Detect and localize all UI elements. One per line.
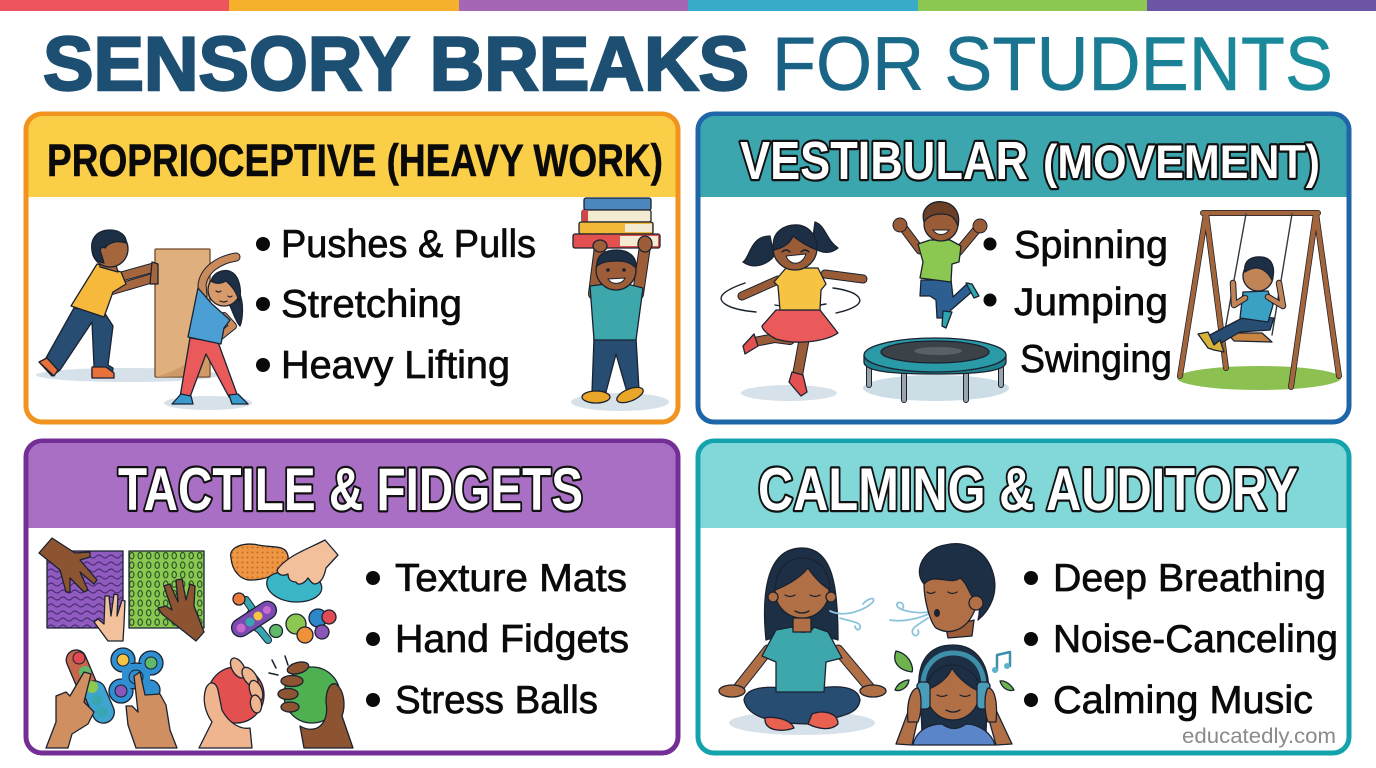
panel 1 list: Pushes & Pulls xyxy=(281,223,536,266)
panel 2 frame xyxy=(698,114,1349,422)
panel 4 list: Noise-Canceling xyxy=(1053,618,1338,661)
panel 2 header band xyxy=(700,116,1346,197)
title: SENSORY BREAKS xyxy=(43,22,749,107)
panel 2 heading: (MOVEMENT) xyxy=(1043,135,1320,188)
panel 2 heading: VESTIBULAR xyxy=(740,131,1028,191)
title xyxy=(43,22,1333,107)
panel: tactile and fidgets xyxy=(26,441,678,753)
icon: music notes xyxy=(992,652,1010,673)
illustration: swing set xyxy=(1177,213,1341,390)
icon: breath swirls xyxy=(830,598,936,636)
panel 4 list: Deep Breathing xyxy=(1053,557,1326,600)
panel: proprioceptive xyxy=(26,114,678,422)
panel 4 frame xyxy=(698,441,1349,753)
illustration: jumping boy xyxy=(893,202,987,328)
panel 1 header band xyxy=(28,116,676,197)
panel 2 list: Swinging xyxy=(1020,338,1172,381)
illustration: meditating girl xyxy=(719,548,886,735)
panel: calming and auditory xyxy=(698,441,1349,753)
panel 1 list xyxy=(256,223,536,387)
illustration: girl stretching xyxy=(164,257,252,410)
illustration: pop fidget and spinner with hands xyxy=(46,647,177,748)
top colour strip xyxy=(0,0,1376,11)
panel 1 list: Stretching xyxy=(281,283,462,326)
illustration: boy lifting books xyxy=(571,198,669,411)
illustration: girl with headphones xyxy=(896,645,1012,745)
illustration: putty and fidget toys xyxy=(228,540,338,643)
panel: vestibular xyxy=(698,114,1349,422)
illustration: trampoline xyxy=(863,338,1009,401)
panel 4 list xyxy=(1024,557,1338,722)
icon: leaves xyxy=(895,651,1014,691)
panel 1 list: Heavy Lifting xyxy=(281,344,510,387)
panel 3 list: Hand Fidgets xyxy=(395,618,629,661)
panel 1 frame xyxy=(26,114,678,422)
book stack xyxy=(573,198,660,248)
panel 2 list: Spinning xyxy=(1014,224,1168,267)
illustration: boy blowing xyxy=(919,544,995,638)
panel 4 list: Calming Music xyxy=(1053,679,1313,722)
panel 2 list: Jumping xyxy=(1014,281,1168,324)
panel 3 list: Stress Balls xyxy=(395,679,598,722)
panel 2 heading xyxy=(740,131,1320,191)
panel 3 list xyxy=(366,557,629,722)
illustration: boy pushing box xyxy=(36,230,220,382)
panel 1 heading: PROPRIOCEPTIVE (HEAVY WORK) xyxy=(47,135,663,186)
panel 3 list: Texture Mats xyxy=(395,557,627,600)
panel 3 frame xyxy=(26,441,678,753)
illustration: stress balls with hands xyxy=(199,655,353,748)
panel 4 header band xyxy=(700,443,1346,528)
footer credit: educatedly.com xyxy=(1182,725,1336,748)
panel 3 header band xyxy=(28,443,676,528)
title: FOR STUDENTS xyxy=(772,22,1333,107)
illustration: texture mats and hands xyxy=(39,538,204,641)
panel 2 list xyxy=(984,224,1172,381)
illustration: spinning girl xyxy=(721,222,863,401)
panel 3 heading: TACTILE & FIDGETS xyxy=(118,456,583,523)
